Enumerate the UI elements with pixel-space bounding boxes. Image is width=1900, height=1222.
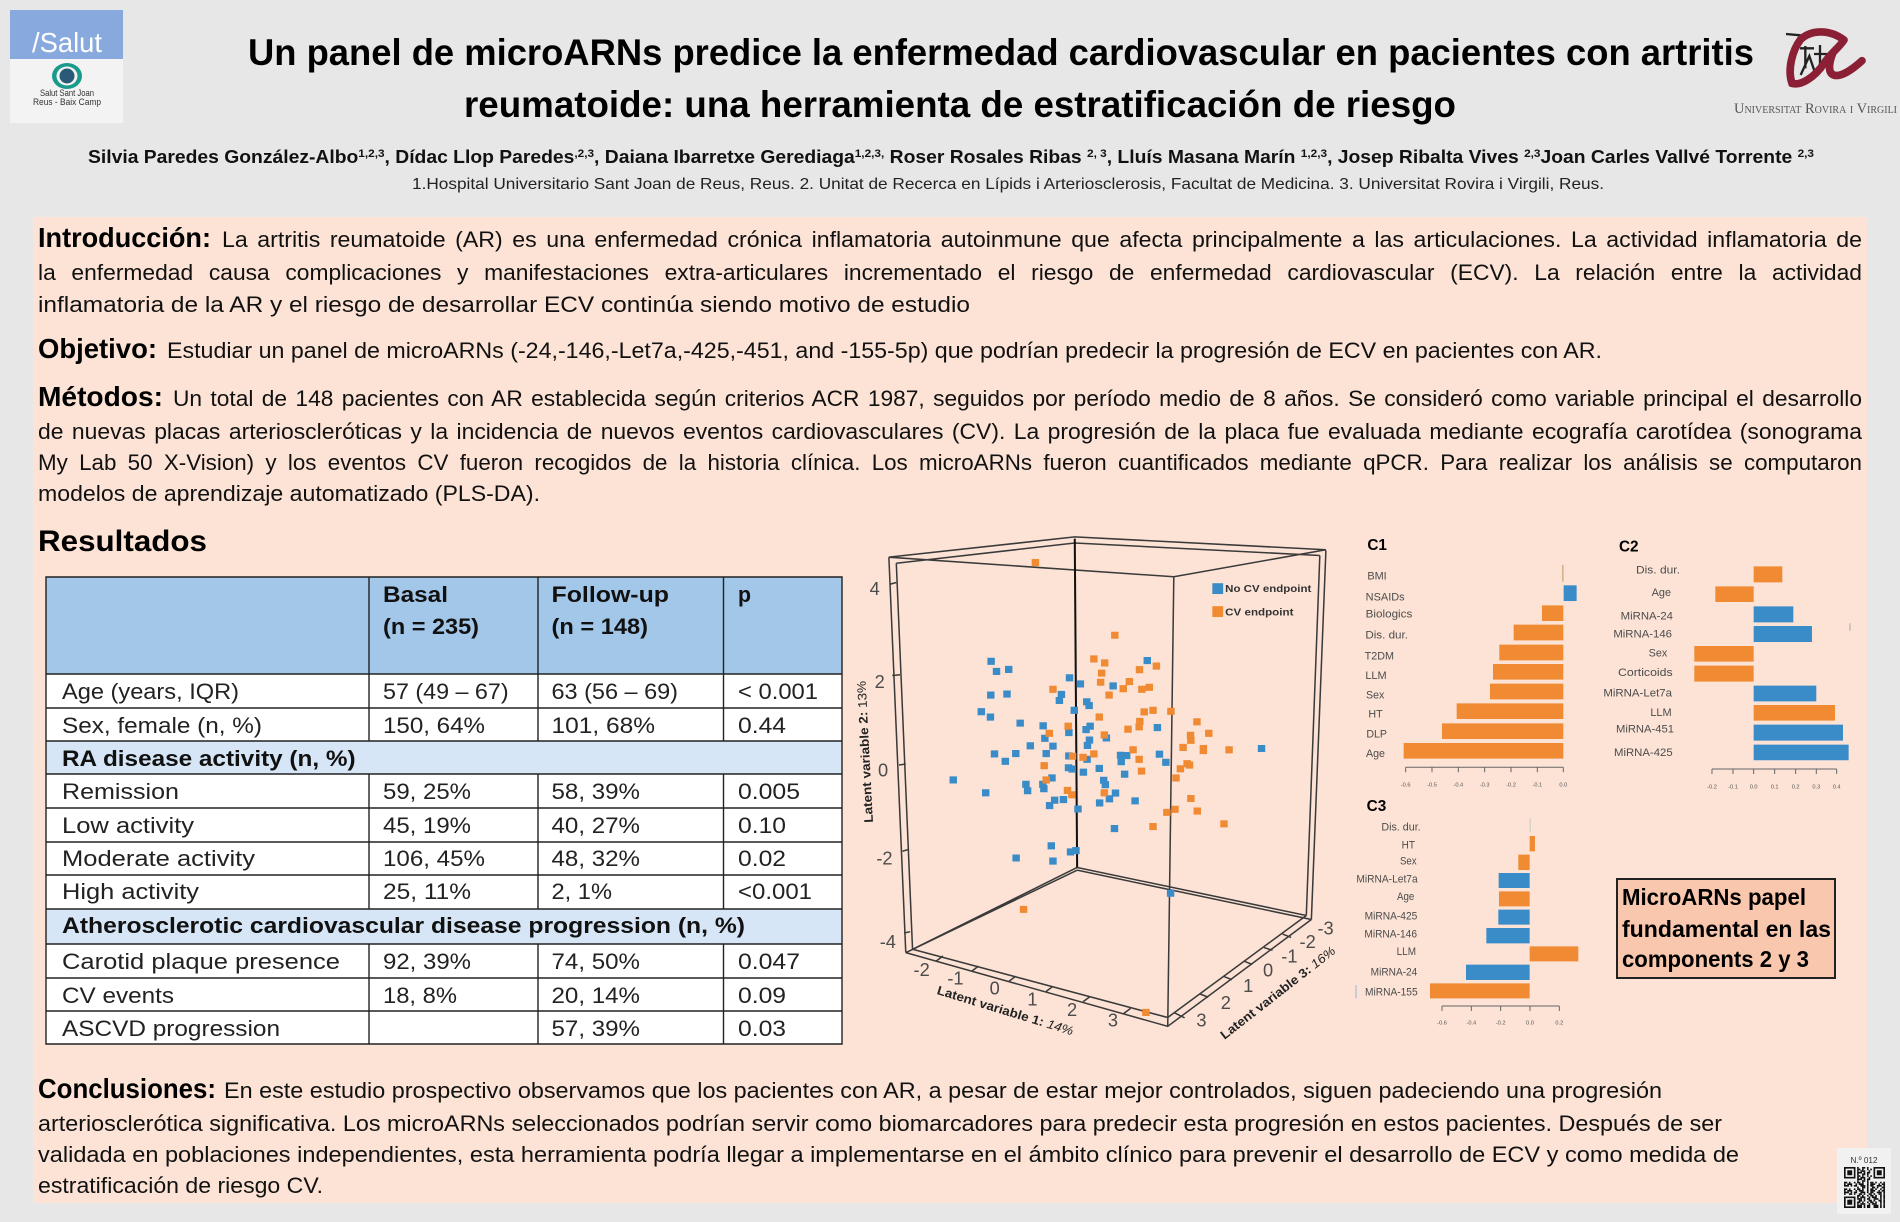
row: moderate activity: 106, 45% [383, 846, 485, 871]
row: remission: 58, 39% [552, 779, 640, 804]
text block: métodos [38, 381, 1863, 506]
C3 axis: 0.2 [1555, 1020, 1563, 1026]
row: age: 57 (49 – 67) [383, 679, 509, 704]
row: CV events: 0.09 [738, 983, 786, 1008]
row: high activity: 25, 11% [383, 879, 471, 904]
callout: microARNs role: components 2 y 3 [1622, 946, 1809, 972]
table header row [383, 582, 751, 639]
panel: main content background [33, 217, 1867, 1203]
C2 variable labels: Sex [1649, 648, 1668, 660]
row: age: Age (years, IQR) [62, 679, 239, 704]
C3 variable labels [1356, 822, 1421, 998]
authors: 2,3 [1524, 148, 1541, 160]
row: CV events [62, 983, 786, 1008]
row: sex: Sex, female (n, %) [62, 713, 262, 738]
row: low activity: 0.10 [738, 813, 786, 838]
table header row: (n = 148) [552, 614, 648, 639]
chart: 3D PLS-DA scatter plot [855, 537, 1338, 1042]
y axis numbers: -4 [880, 931, 896, 952]
row: age [62, 679, 818, 704]
z axis numbers: 0 [1263, 960, 1273, 981]
legend: CV endpoint [1225, 607, 1294, 618]
axis label: latent variable 1: Latent variable 1: 14% [935, 983, 1075, 1038]
C2 variable labels: MiRNA-451 [1616, 723, 1674, 735]
C1 variable labels: Biologics [1366, 609, 1412, 621]
axis label: latent variable 3: Latent variable 3: 16% [1218, 944, 1338, 1042]
C2 variable labels: Corticoids [1618, 667, 1673, 679]
row: age: < 0.001 [738, 679, 818, 704]
C1 axis [1401, 767, 1567, 789]
table header row: (n = 235) [383, 614, 479, 639]
C2 variable labels: LLM [1650, 707, 1672, 719]
authors: 1,2,3 [1301, 148, 1327, 160]
C2 variable labels: MiRNA-Let7a [1603, 688, 1672, 700]
title [248, 32, 1754, 125]
row: high activity: <0.001 [738, 879, 812, 904]
row: remission: 59, 25% [383, 779, 471, 804]
row: carotid plaque [62, 949, 800, 974]
C1 axis: -0.2 [1506, 783, 1516, 789]
authors: Joan Carles Vallvé Torrente [1541, 147, 1798, 167]
z axis numbers: 3 [1196, 1010, 1207, 1031]
row: remission: Remission [62, 779, 179, 804]
QR code with poster number: N.º 012 [1850, 1155, 1878, 1165]
C3 variable labels: Dis. dur. [1381, 822, 1421, 834]
row: ASCVD progression [62, 1016, 786, 1041]
callout: microARNs role: fundamental en las [1622, 916, 1831, 942]
text block: conclusiones: estratificación de riesgo CV. [38, 1173, 323, 1198]
C1 variable labels: LLM [1365, 670, 1387, 682]
row: high activity: 2, 1% [552, 879, 612, 904]
C2 variable labels: Age [1652, 587, 1671, 599]
row: moderate activity: 48, 32% [552, 846, 640, 871]
table: baseline and follow-up characteristics [46, 577, 842, 1044]
C2 axis [1707, 769, 1841, 791]
row: remission [62, 779, 800, 804]
row: carotid plaque: Carotid plaque presence [62, 949, 340, 974]
z axis numbers: 2 [1221, 992, 1231, 1013]
z axis numbers: -3 [1317, 918, 1334, 939]
row: sex: 101, 68% [552, 713, 655, 738]
y axis numbers: 2 [875, 671, 885, 692]
authors: Roser Rosales Ribas [884, 147, 1087, 167]
C1 variable labels: DLP [1366, 728, 1387, 740]
row: moderate activity [62, 846, 786, 871]
text block: métodos: de nuevas placas arterioscleróticas y la incidencia de nuevos eventos cardiovasculares (CV). La progresión de la placa fue evaluada mediante ecografía carotídea (sonograma [38, 419, 1863, 444]
C1 axis: -0.4 [1453, 783, 1463, 789]
z axis numbers: -2 [1300, 931, 1316, 952]
authors: , Dídac Llop Paredes [385, 147, 574, 167]
C1 axis: 0.0 [1559, 783, 1567, 789]
row: carotid plaque: 0.047 [738, 949, 800, 974]
C3 axis: -0.2 [1496, 1020, 1506, 1026]
C1 axis: -0.5 [1427, 783, 1437, 789]
C1 variable labels: NSAIDs [1366, 591, 1405, 603]
x axis numbers: 2 [1067, 999, 1077, 1020]
C2 axis: 0.1 [1771, 785, 1779, 791]
row: low activity [62, 813, 786, 838]
QR code with poster number [1837, 1148, 1891, 1214]
text block: introducción: inflamatoria de la AR y el riesgo de desarrollar ECV continúa siendo motivo de estudio [38, 292, 970, 317]
C1 variable labels: HT [1368, 708, 1383, 720]
row: high activity: High activity [62, 879, 200, 904]
logo: Salut Sant Joan: Reus - Baix Camp [33, 97, 101, 108]
C2 axis: 0.3 [1812, 785, 1820, 791]
C1 variable labels: T2DM [1365, 650, 1394, 662]
axis label: latent variable 2: Latent variable 2: 13% [855, 681, 876, 823]
C1 variable labels [1365, 570, 1412, 760]
row: moderate activity: Moderate activity [62, 846, 256, 871]
text block: métodos: My Lab 50 X-Vision) y los eventos CV fueron recogidos de la historia clínica. Los microARNs fueron cuantificados mediante qPCR. Para realizar los análisis se computaron [38, 450, 1862, 475]
authors: 1,2,3 [358, 148, 385, 160]
C3 axis: 0.0 [1526, 1020, 1534, 1026]
row: low activity: 40, 27% [552, 813, 640, 838]
C3 variable labels: Sex [1400, 856, 1417, 868]
authors: ,2,3 [574, 148, 594, 160]
C2 axis: 0.4 [1833, 785, 1841, 791]
C3 variable labels: MiRNA-Let7a [1356, 874, 1418, 886]
C1 variable labels: Sex [1366, 689, 1385, 701]
chart title C3: C3 [1367, 798, 1386, 815]
text block: introducción: la enfermedad causa complicaciones y manifestaciones extra-articulares incrementado el riesgo de enfermedad cardiovascular (ECV). La relación entre la actividad [38, 260, 1862, 285]
y axis numbers: 0 [878, 760, 888, 781]
row: sex [62, 713, 786, 738]
authors: Silvia Paredes González-Albo [88, 147, 340, 167]
chart: C1 loadings bar chart [1365, 537, 1577, 789]
text block: objetivo: Objetivo: [38, 333, 157, 364]
row: ASCVD progression: 0.03 [738, 1016, 786, 1041]
text block: introducción: La artritis reumatoide (AR) es una enfermedad crónica inflamatoria autoinmune que afecta principalmente a las articulaciones. La actividad inflamatoria de [222, 227, 1862, 252]
C3 axis [1437, 1006, 1563, 1026]
C3 variable labels: MiRNA-24 [1371, 966, 1417, 978]
authors: 2, 3 [1087, 148, 1107, 160]
C1 variable labels: Dis. dur. [1365, 629, 1408, 641]
text block: introducción [38, 222, 1862, 317]
table header row: Follow-up [552, 582, 669, 607]
row: age: 63 (56 – 69) [552, 679, 678, 704]
legend [1212, 583, 1312, 618]
C3 variable labels: MiRNA-146 [1364, 928, 1417, 940]
row: carotid plaque: 74, 50% [552, 949, 640, 974]
x axis numbers: 0 [990, 978, 1000, 999]
C3 bars [1355, 818, 1578, 998]
C3 variable labels: HT [1402, 840, 1415, 852]
row: high activity [62, 879, 812, 904]
C3 variable labels: LLM [1397, 946, 1416, 958]
table header row: Basal [383, 582, 448, 607]
C3 axis: -0.6 [1437, 1020, 1447, 1026]
text block: métodos: Un total de 148 pacientes con AR establecida según criterios ACR 1987, seguidos por período medio de 8 años. Se consideró como variable principal el desarrollo [173, 386, 1862, 411]
C2 axis: 0.2 [1792, 785, 1800, 791]
row: ASCVD progression: ASCVD progression [62, 1016, 280, 1041]
plot frame [889, 537, 1326, 1026]
row: CV events: CV events [62, 983, 174, 1008]
C1 variable labels: Age [1366, 748, 1385, 760]
C2 axis: -0.2 [1707, 785, 1717, 791]
chart: C2 loadings bar chart [1603, 539, 1851, 791]
callout: microARNs role: MicroARNs papel [1622, 884, 1806, 910]
text block: introducción: Introducción: [38, 222, 211, 253]
chart: C3 loadings bar chart [1355, 798, 1578, 1026]
text block: métodos: modelos de aprendizaje automatizado (PLS-DA). [38, 481, 540, 506]
row: ASCVD progression: 57, 39% [552, 1016, 640, 1041]
C2 variable labels [1603, 564, 1680, 759]
authors: , Josep Ribalta Vives [1327, 147, 1524, 167]
C1 bars [1404, 565, 1577, 759]
logo: Salut Sant Joan: /Salut [32, 27, 102, 58]
C2 variable labels: MiRNA-425 [1614, 747, 1673, 759]
chart title C1: C1 [1367, 537, 1387, 554]
logo: Salut Sant Joan [10, 10, 123, 123]
C3 variable labels: MiRNA-425 [1365, 910, 1417, 922]
x axis numbers: -1 [947, 967, 964, 988]
C2 variable labels: Dis. dur. [1636, 564, 1680, 576]
row heading: RA disease activity: RA disease activity (n, %) [62, 746, 356, 771]
row: remission: 0.005 [738, 779, 800, 804]
row: low activity: 45, 19% [383, 813, 471, 838]
text block: conclusiones: En este estudio prospectivo observamos que los pacientes con AR, a pesar de estar mejor controlados, siguen padeciendo una progresión [224, 1078, 1662, 1103]
authors: , Daiana Ibarretxe Gerediaga [594, 147, 856, 167]
row: low activity: Low activity [62, 813, 195, 838]
callout: microARNs role [1617, 879, 1835, 978]
legend: No CV endpoint [1225, 584, 1312, 595]
C1 axis: -0.1 [1532, 783, 1542, 789]
row: sex: 150, 64% [383, 713, 485, 738]
y axis numbers [870, 578, 896, 952]
authors: 1,2,3, [855, 148, 884, 160]
z axis numbers [1196, 918, 1334, 1031]
logo: Universitat Rovira i Virgili: Universitat Rovira i Virgili [1734, 101, 1897, 117]
text block: conclusiones: arteriosclerótica significativa. Los microARNs seleccionados podrían servir como biomarcadores para predecir esta progresión en estos pacientes. Después de ser [38, 1111, 1722, 1136]
title: Un panel de microARNs predice la enfermedad cardiovascular en pacientes con artritis [248, 32, 1754, 73]
C2 variable labels: MiRNA-24 [1621, 610, 1673, 622]
logo: Universitat Rovira i Virgili [1734, 32, 1897, 117]
logo: Salut Sant Joan: Salut Sant Joan [40, 88, 94, 99]
row: moderate activity: 0.02 [738, 846, 786, 871]
C2 variable labels: MiRNA-146 [1613, 629, 1672, 641]
x axis numbers [914, 959, 1118, 1031]
C2 axis: -0.1 [1728, 785, 1738, 791]
y axis numbers: -2 [876, 847, 893, 868]
text block: conclusiones: validada en poblaciones independientes, esta herramienta podría llegar a implementarse en el ámbito clínico para prevenir el desarrollo de ECV y como medida de [38, 1142, 1739, 1167]
C1 axis: -0.6 [1401, 783, 1411, 789]
C2 axis: 0.0 [1750, 785, 1758, 791]
authors: 2,3 [1798, 148, 1814, 160]
x axis numbers: 3 [1108, 1010, 1118, 1031]
affiliations: 1.Hospital Universitario Sant Joan de Reus, Reus. 2. Unitat de Recerca en Lípids i Arteriosclerosis, Facultat de Medicina. 3. Universitat Rovira i Virgili, Reus. [412, 176, 1604, 193]
C3 variable labels: Age [1397, 891, 1414, 903]
title: reumatoide: una herramienta de estratificación de riesgo [464, 84, 1456, 125]
authors: , Lluís Masana Marín [1107, 147, 1301, 167]
chart title C2: C2 [1619, 539, 1639, 556]
row: sex: 0.44 [738, 713, 786, 738]
points: no CV endpoint [950, 658, 1265, 896]
C1 variable labels: BMI [1367, 570, 1387, 582]
text block: objetivo: Estudiar un panel de microARNs (-24,-146,-Let7a,-425,-451, and -155-5p) que podrían predecir la progresión de ECV en pacientes con AR. [167, 338, 1602, 363]
heading: resultados: Resultados [38, 525, 207, 558]
row: CV events: 20, 14% [552, 983, 640, 1008]
C2 bars [1694, 566, 1851, 760]
x axis numbers: 1 [1027, 989, 1038, 1010]
text block: conclusiones [38, 1073, 1739, 1198]
points: CV endpoint [1020, 560, 1232, 1016]
z axis numbers: 1 [1243, 975, 1253, 996]
row: CV events: 18, 8% [383, 983, 457, 1008]
table header row: p [738, 582, 751, 607]
text block: métodos: Métodos: [38, 381, 163, 412]
text block: conclusiones: Conclusiones: [38, 1073, 216, 1104]
row heading: atherosclerotic progression: Atherosclerotic cardiovascular disease progression (n, %) [62, 913, 745, 938]
C3 axis: -0.4 [1466, 1020, 1476, 1026]
row: carotid plaque: 92, 39% [383, 949, 471, 974]
y axis numbers: 4 [870, 578, 880, 599]
C1 axis: -0.3 [1480, 783, 1490, 789]
z axis numbers: -1 [1281, 945, 1298, 966]
C3 variable labels: MiRNA-155 [1365, 986, 1418, 998]
x axis numbers: -2 [914, 959, 930, 980]
